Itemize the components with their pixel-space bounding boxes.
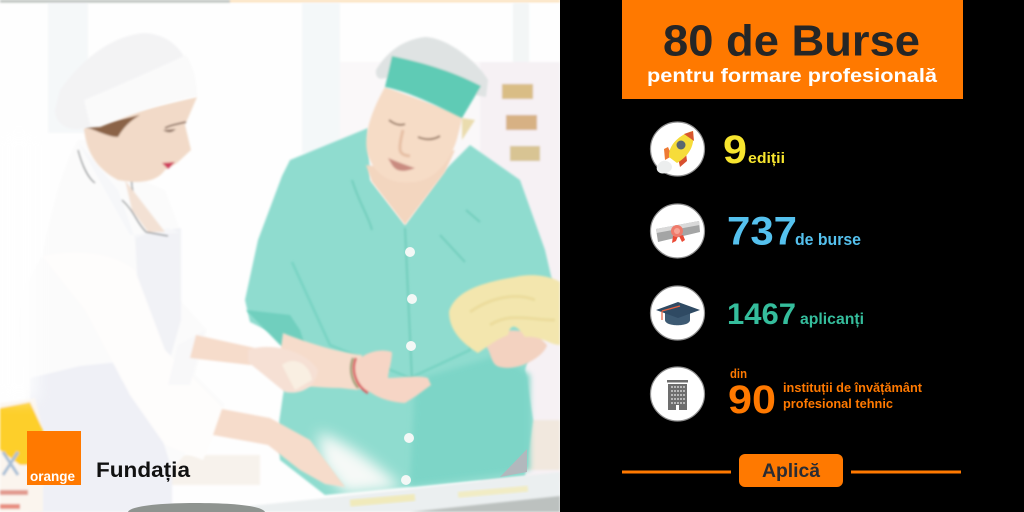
left woman: head and face — [84, 97, 197, 182]
pack of yellow pasta — [0, 398, 43, 512]
icon: graduation cap — [650, 286, 704, 340]
stat: 90 institutions: din — [730, 367, 747, 381]
panel: black info panel — [560, 0, 1024, 512]
logo: Orange — [27, 431, 81, 485]
photo background: kitchen wall and posters — [0, 0, 560, 485]
stat: 1467 applicants: aplicanți — [800, 311, 864, 328]
header banner — [622, 0, 963, 99]
subheading: pentru formare profesională — [647, 65, 937, 87]
icon: diploma — [650, 204, 704, 258]
button: apply — [739, 454, 843, 487]
button: apply: Aplică — [762, 461, 820, 482]
flour cloud — [318, 432, 402, 494]
dough ball and holding hand — [449, 275, 560, 368]
stat: 1467 applicants — [727, 298, 864, 331]
stat: 90 institutions: instituții de învățământ — [783, 380, 923, 395]
stat: 1467 applicants: 1467 — [727, 298, 796, 331]
logo text: Fundația: Fundația — [96, 459, 190, 482]
right woman: teal coat — [245, 128, 552, 495]
stat: 9 editions — [723, 128, 785, 172]
photo: two women kneading dough — [0, 0, 560, 512]
stat: 90 institutions — [728, 367, 923, 422]
right woman: teal cap — [376, 37, 488, 118]
stat: 90 institutions: profesional tehnic — [783, 396, 893, 411]
stat: 737 scholarships: de burse — [795, 231, 861, 249]
left woman: white chef hat — [55, 33, 197, 129]
stat: 737 scholarships: 737 — [727, 210, 797, 254]
left woman: body and white coat — [18, 140, 225, 512]
logo: Orange: orange — [30, 468, 75, 484]
stat: 737 scholarships — [727, 210, 861, 254]
stat: 9 editions: 9 — [723, 128, 747, 172]
heading: 80 de Burse — [663, 16, 920, 66]
stat: 9 editions: ediții — [748, 150, 785, 167]
right woman: face and neck — [366, 87, 475, 225]
left woman: arms and hands — [168, 330, 345, 487]
stat: 90 institutions: 90 — [728, 378, 776, 422]
work table and bowl — [128, 472, 560, 512]
icon: rocket — [650, 122, 704, 176]
icon: building — [650, 367, 704, 421]
soft fade on left edge — [0, 130, 38, 400]
right woman: arm, hand and bracelet — [278, 333, 431, 403]
